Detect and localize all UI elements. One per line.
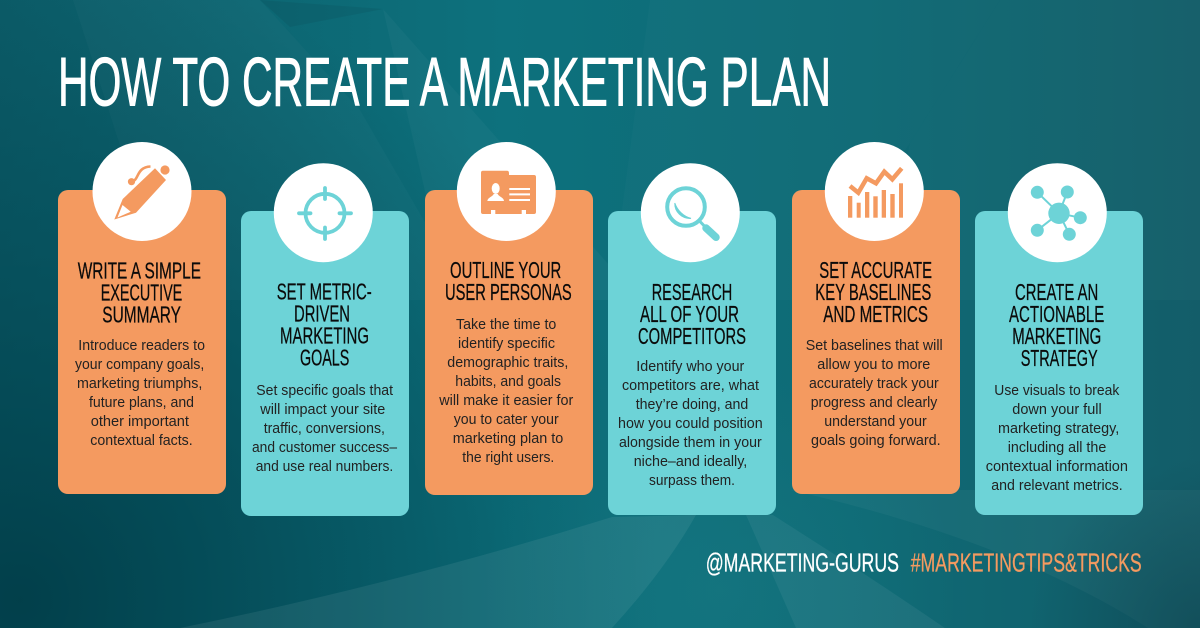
icon: network nodes (1031, 186, 1087, 241)
body text (438, 316, 573, 466)
heading: RESEARCH (652, 279, 732, 305)
panel: step 5 baselines and metrics (792, 142, 960, 494)
heading: SUMMARY (102, 301, 181, 327)
body text: Introduce readers to (78, 337, 205, 354)
body text: understand your (824, 413, 927, 430)
body text: and use real numbers. (256, 458, 393, 475)
heading: GOALS (300, 345, 349, 371)
card background (58, 190, 226, 494)
body text (252, 382, 398, 475)
heading: COMPETITORS (638, 323, 746, 349)
body text: demographic traits, (447, 354, 568, 371)
icon badge (825, 142, 924, 241)
body text: future plans, and (89, 394, 194, 411)
panel: step 6 marketing strategy (975, 163, 1143, 515)
heading: MARKETING (1012, 323, 1101, 349)
body text (618, 358, 763, 489)
body text: how you could position (618, 415, 763, 432)
icon badge (641, 163, 740, 262)
body text: allow you to more (817, 356, 930, 373)
body text: they’re doing, and (636, 396, 748, 413)
heading: AND METRICS (823, 301, 928, 327)
heading (277, 279, 372, 371)
body text: and customer success– (252, 439, 398, 456)
body text: you to cater your (454, 411, 559, 428)
heading (1009, 279, 1104, 371)
body text: other important (91, 413, 190, 430)
card background (792, 190, 960, 494)
body text: identify specific (458, 335, 555, 352)
heading: EXECUTIVE (101, 279, 182, 305)
heading: WRITE A SIMPLE (78, 257, 201, 283)
body text: Take the time to (456, 316, 556, 333)
body text: will make it easier for (438, 392, 573, 409)
heading: ACTIONABLE (1009, 301, 1104, 327)
heading: KEY BASELINES (815, 279, 931, 305)
body text: competitors are, what (622, 377, 760, 394)
body text: including all the (1008, 439, 1106, 456)
body text: progress and clearly (811, 394, 938, 411)
panel: step 2 metric-driven goals (241, 163, 409, 516)
icon badge (1008, 163, 1107, 262)
icon badge (274, 163, 373, 262)
icon: magnifying glass (667, 188, 716, 237)
heading (638, 279, 746, 349)
body text: niche–and ideally, (634, 453, 747, 470)
body text: contextual information (986, 458, 1128, 475)
panel: step 3 user personas (425, 142, 593, 495)
body text: alongside them in your (619, 434, 762, 451)
body text: marketing plan to (453, 430, 563, 447)
heading (445, 257, 572, 305)
body text (806, 337, 943, 449)
heading: STRATEGY (1021, 345, 1098, 371)
body text: habits, and goals (455, 373, 561, 390)
heading: SET METRIC- (277, 279, 372, 305)
body text: goals going forward. (811, 432, 941, 449)
card background (241, 211, 409, 516)
card background (425, 190, 593, 495)
body text: marketing triumphs, (77, 375, 202, 392)
body text: will impact your site (259, 401, 385, 418)
body text: and relevant metrics. (991, 477, 1123, 494)
panel: step 4 research competitors (608, 163, 776, 515)
card background (975, 211, 1143, 515)
body text: Set baselines that will (806, 337, 943, 354)
body text: down your full (1012, 401, 1102, 418)
icon badge (92, 142, 192, 241)
heading: OUTLINE YOUR (450, 257, 561, 283)
panel: step 1 write executive summary (58, 142, 226, 494)
body text: Set specific goals that (256, 382, 394, 399)
icon badge (457, 142, 556, 241)
heading: CREATE AN (1015, 279, 1098, 305)
body text: Identify who your (636, 358, 744, 375)
heading: SET ACCURATE (819, 257, 932, 283)
heading: USER PERSONAS (445, 279, 572, 305)
footer handle: @MARKETING-GURUS (706, 548, 899, 578)
body text (986, 382, 1128, 494)
heading: DRIVEN (294, 301, 350, 327)
heading: ALL OF YOUR (640, 301, 739, 327)
icon: target (299, 188, 351, 239)
body text: marketing strategy, (998, 420, 1119, 437)
heading (78, 257, 201, 327)
body text: surpass them. (649, 472, 735, 489)
heading (815, 257, 932, 327)
card background (608, 211, 776, 515)
icon: profile folder (481, 171, 536, 214)
body text: your company goals, (75, 356, 204, 373)
icon: growth chart (848, 168, 903, 218)
icon: pencil (114, 165, 170, 220)
body text (75, 337, 205, 449)
heading: MARKETING (280, 323, 369, 349)
body text: the right users. (462, 449, 554, 466)
body text: contextual facts. (90, 432, 193, 449)
body text: accurately track your (809, 375, 939, 392)
body text: traffic, conversions, (264, 420, 385, 437)
body text: Use visuals to break (994, 382, 1120, 399)
